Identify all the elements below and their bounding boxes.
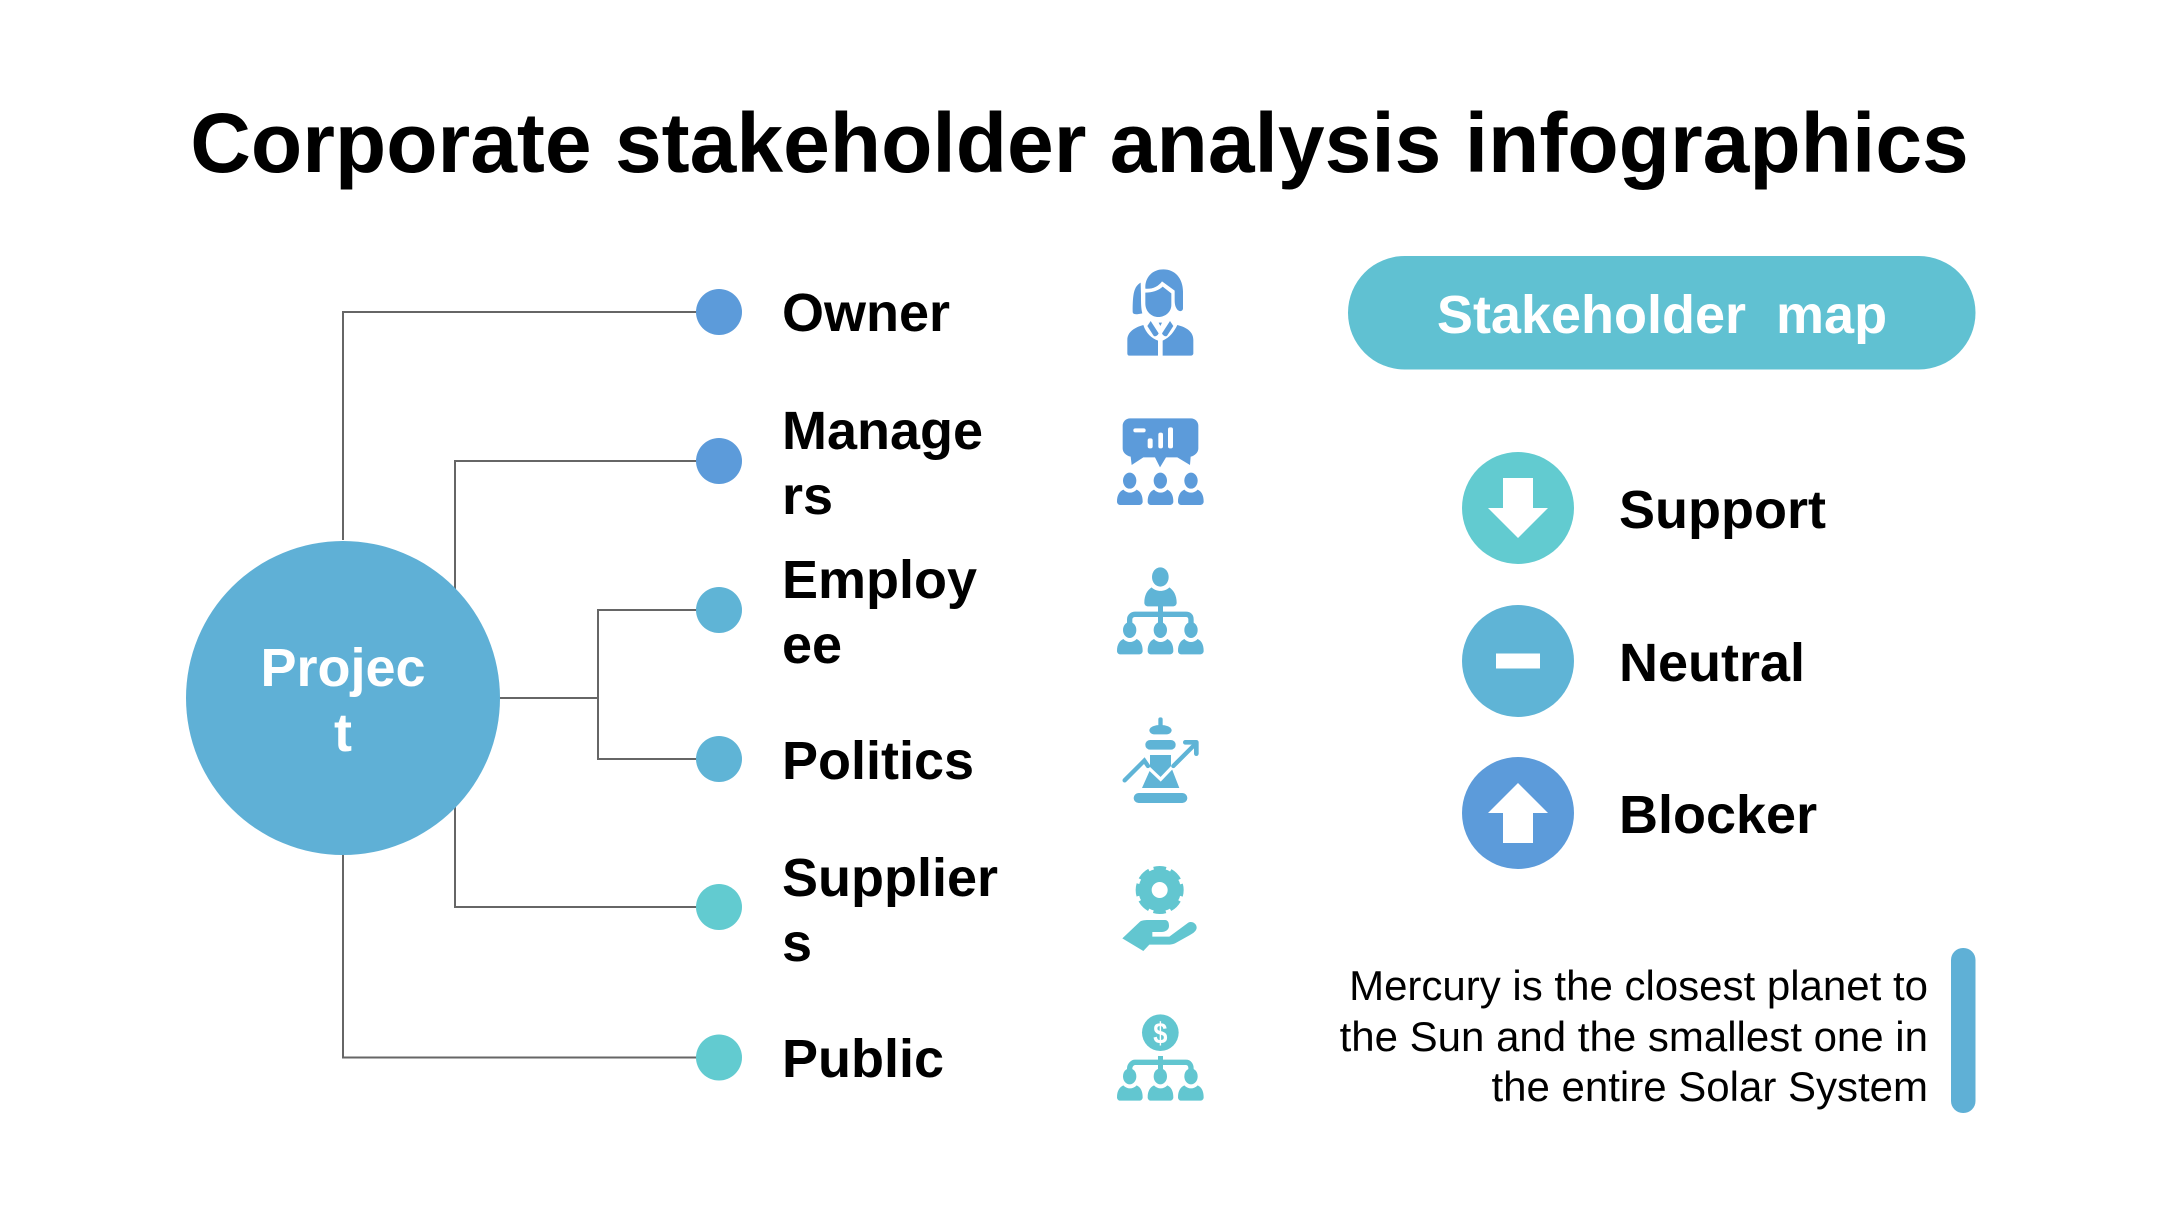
label: employee: ee — [782, 615, 842, 675]
label: employee — [782, 550, 977, 675]
icon: owner — [1127, 269, 1193, 356]
label: managers — [782, 401, 983, 526]
label: managers: rs — [782, 466, 833, 526]
icon: politics — [1125, 717, 1196, 803]
label: suppliers — [782, 848, 998, 973]
connector lines — [343, 312, 719, 1058]
legend label: neutral: Neutral — [1619, 633, 1805, 693]
label: politics: Politics — [782, 731, 974, 791]
legend label: blocker: Blocker — [1619, 785, 1817, 845]
label: suppliers: Supplier — [782, 848, 998, 908]
description text: Mercury is the closest planet to — [1349, 962, 1928, 1009]
label: owner: Owner — [782, 283, 950, 343]
icon: suppliers — [1122, 869, 1197, 951]
dot: employee — [696, 587, 742, 633]
label: suppliers: s — [782, 913, 812, 973]
legend icon: neutral — [1462, 605, 1574, 717]
heading pill: stakeholder map — [1348, 256, 1976, 370]
label: employee: Employ — [782, 550, 977, 610]
dot: managers — [696, 438, 742, 484]
accent bar — [1951, 948, 1976, 1113]
heading pill: stakeholder map: Stakeholder map — [1437, 285, 1887, 345]
icon: public — [1117, 1014, 1204, 1101]
dot: suppliers — [696, 884, 742, 930]
icon: employee — [1117, 567, 1204, 654]
project hub circle: Projec — [260, 638, 426, 698]
dot: owner — [696, 289, 742, 335]
project hub circle — [186, 541, 500, 855]
label: public: Public — [782, 1029, 944, 1089]
description text: the entire Solar System — [1491, 1063, 1928, 1110]
title: Corporate stakeholder analysis infographics — [190, 96, 1969, 190]
icon: managers — [1117, 418, 1204, 505]
description text — [1340, 962, 1928, 1110]
description text: the Sun and the smallest one in — [1340, 1013, 1928, 1060]
label: managers: Manage — [782, 401, 983, 461]
legend label: support: Support — [1619, 480, 1826, 540]
project hub circle: t — [334, 703, 352, 763]
legend icon: blocker — [1462, 757, 1574, 869]
dot: politics — [696, 736, 742, 782]
dot: public — [696, 1034, 742, 1080]
icon: public: $ — [1153, 1016, 1168, 1050]
legend icon: support — [1462, 452, 1574, 564]
